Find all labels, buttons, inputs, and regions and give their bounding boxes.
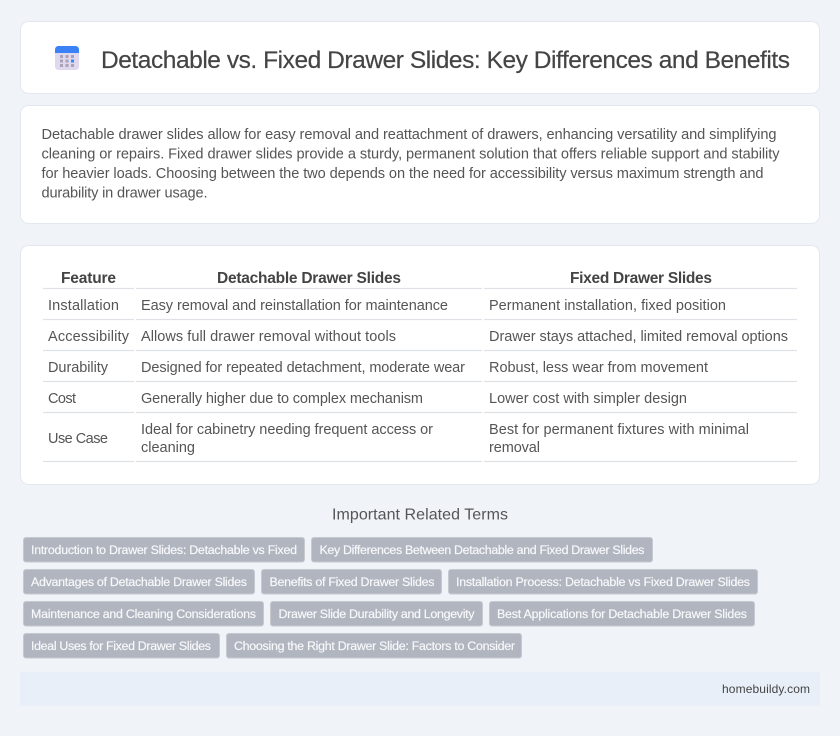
- row: durability: [48, 360, 708, 376]
- row: use case: Best for permanent fixtures with minimal: [489, 422, 749, 438]
- row: installation: Permanent installation, fixed position: [489, 298, 726, 314]
- row: use case: removal: [489, 440, 540, 456]
- row: durability: Robust, less wear from movement: [489, 360, 708, 376]
- table header row: [61, 270, 712, 287]
- tag: Maintenance and Cleaning Considerations: [31, 607, 256, 621]
- row: use case: cleaning: [141, 440, 195, 456]
- tag: [24, 570, 254, 594]
- related term tags: [24, 538, 758, 658]
- tag: [270, 602, 482, 626]
- tag: Benefits of Fixed Drawer Slides: [270, 575, 434, 589]
- footer: [20, 672, 820, 706]
- row: cost: Cost: [48, 391, 76, 407]
- footer source text: homebuildy.com: [722, 682, 810, 696]
- row: cost: Generally higher due to complex mechanism: [141, 391, 423, 407]
- description text: Detachable drawer slides allow for easy removal and reattachment of drawers, enhancing versatility and simplifying: [42, 127, 776, 143]
- row: use case: Use Case: [48, 431, 108, 447]
- tag: [24, 634, 220, 658]
- tag: Introduction to Drawer Slides: Detachable vs Fixed: [31, 543, 297, 557]
- row: accessibility: Allows full drawer removal without tools: [141, 329, 396, 345]
- description text: [42, 127, 780, 202]
- row: installation: [48, 298, 726, 314]
- row: use case: [48, 422, 749, 456]
- tag: Best Applications for Detachable Drawer Slides: [497, 607, 747, 621]
- icon: calendar: [55, 46, 79, 70]
- tag: [312, 538, 652, 562]
- tag: Drawer Slide Durability and Longevity: [278, 607, 475, 621]
- row: accessibility: Drawer stays attached, limited removal options: [489, 329, 788, 345]
- row: accessibility: [48, 329, 788, 345]
- row: use case: Ideal for cabinetry needing frequent access or: [141, 422, 433, 438]
- table header row: Detachable Drawer Slides: [217, 270, 401, 287]
- tag: [490, 602, 754, 626]
- row: cost: [48, 391, 687, 407]
- row: durability: Durability: [48, 360, 109, 376]
- tag: Ideal Uses for Fixed Drawer Slides: [31, 639, 211, 653]
- row: accessibility: Accessibility: [48, 329, 130, 345]
- table header row: Fixed Drawer Slides: [570, 270, 712, 287]
- panel: description: [20, 106, 820, 224]
- tag: [226, 634, 522, 658]
- panel: comparison table: [20, 246, 820, 484]
- row: cost: Lower cost with simpler design: [489, 391, 687, 407]
- tag: [24, 538, 304, 562]
- tag: Choosing the Right Drawer Slide: Factors to Consider: [234, 639, 515, 653]
- table header row: Feature: [61, 270, 116, 287]
- heading: important related terms: Important Related Terms: [332, 506, 508, 524]
- header panel: [20, 22, 820, 94]
- tag: [262, 570, 442, 594]
- description text: cleaning or repairs. Fixed drawer slides provide a sturdy, permanent solution that offers reliable support and stability: [42, 146, 780, 162]
- tag: [448, 570, 758, 594]
- row: installation: Installation: [48, 298, 119, 314]
- row: durability: Designed for repeated detachment, moderate wear: [141, 360, 465, 376]
- description text: for heavier loads. Choosing between the two depends on the need for accessibility versus maximum strength and: [42, 166, 764, 182]
- tag: Advantages of Detachable Drawer Slides: [31, 575, 247, 589]
- row: installation: Easy removal and reinstallation for maintenance: [141, 298, 448, 314]
- description text: durability in drawer usage.: [42, 186, 208, 202]
- title: Detachable vs. Fixed Drawer Slides: Key Differences and Benefits: [101, 47, 790, 74]
- tag: Key Differences Between Detachable and Fixed Drawer Slides: [320, 543, 644, 557]
- tag: Installation Process: Detachable vs Fixed Drawer Slides: [456, 575, 750, 589]
- tag: [24, 602, 264, 626]
